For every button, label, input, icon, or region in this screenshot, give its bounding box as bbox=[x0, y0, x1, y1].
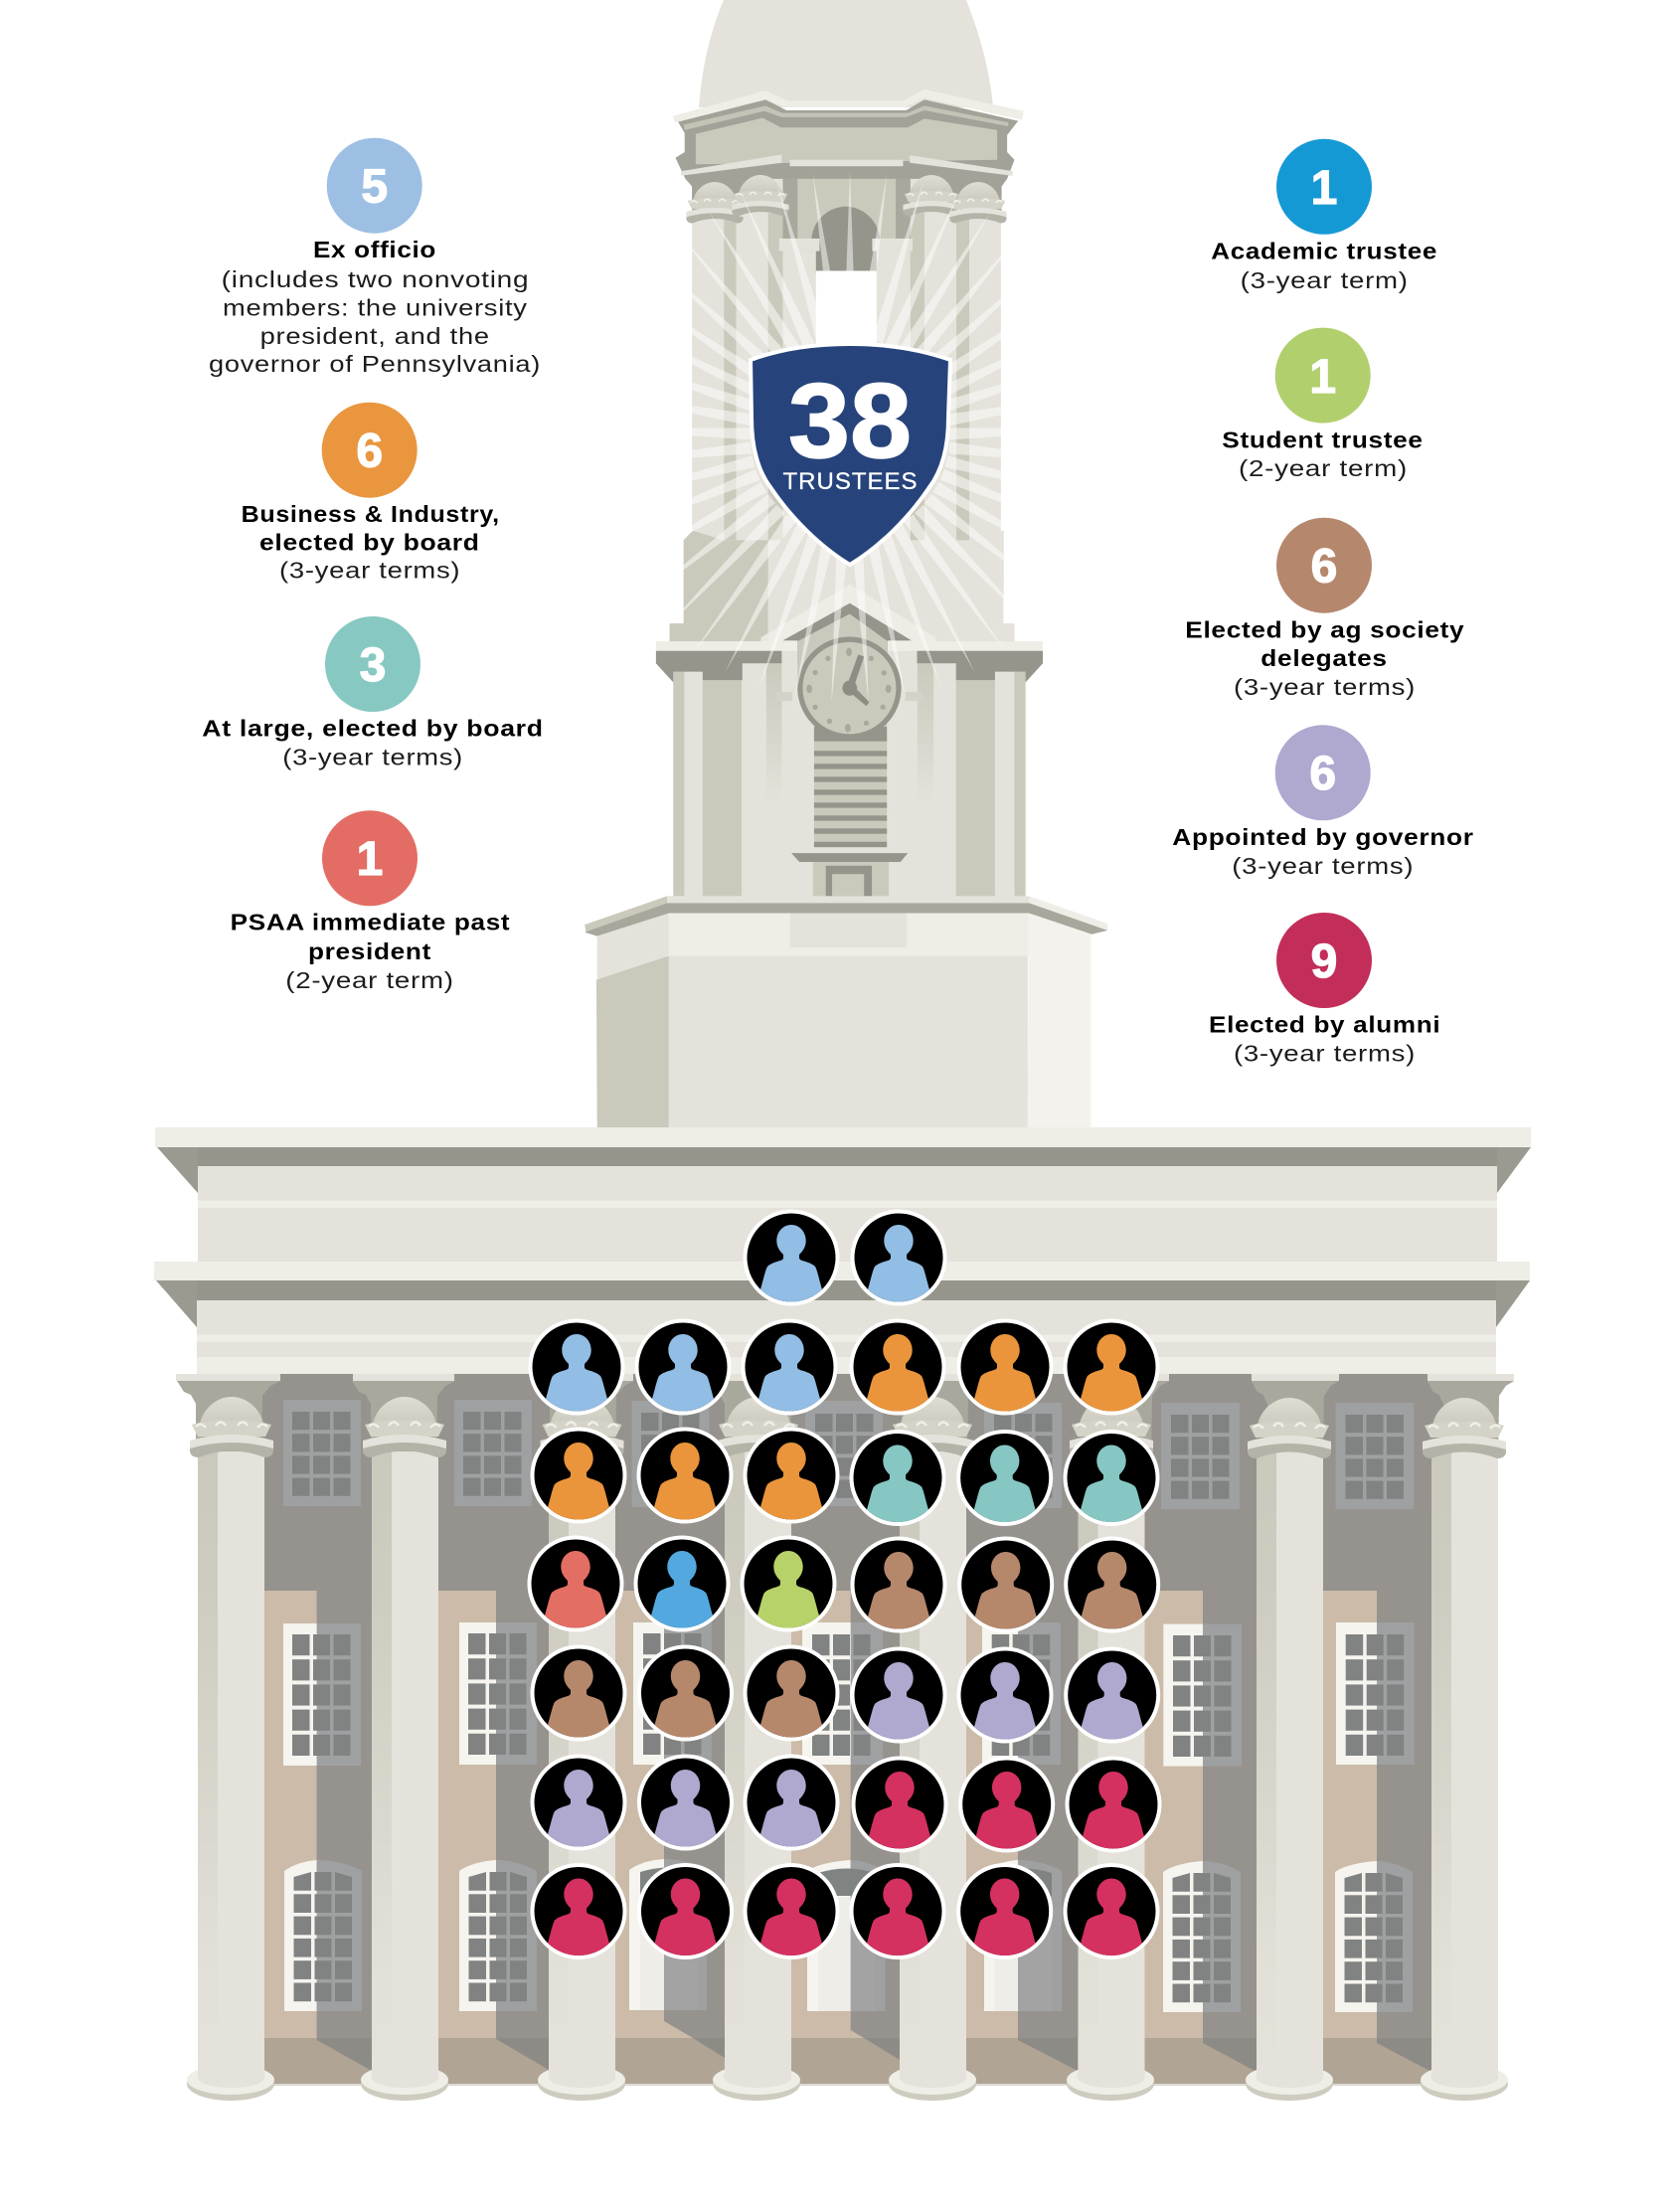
legend: elected by alumni bbox=[1209, 913, 1440, 1066]
legend: appointed by governor bbox=[1172, 725, 1474, 879]
ground band and cast shadows bbox=[232, 2038, 1464, 2086]
legend: ex officio: Ex officio bbox=[313, 237, 436, 262]
legend: appointed by governor: (3-year terms) bbox=[1232, 853, 1414, 879]
legend: ex officio: 5 bbox=[361, 161, 388, 213]
avatar row 3 bbox=[533, 1430, 1157, 1524]
legend: ag society delegates: 6 bbox=[1311, 541, 1337, 593]
legend: academic trustee: 1 bbox=[1311, 162, 1337, 215]
dome bbox=[699, 0, 993, 107]
legend: ex officio: members: the university bbox=[223, 294, 528, 320]
columns bbox=[176, 1374, 1514, 2101]
legend: ag society delegates: delegates bbox=[1260, 645, 1388, 671]
legend: PSAA bbox=[231, 810, 510, 993]
legend: at large: At large, elected by board bbox=[202, 716, 544, 742]
legend: ex officio: (includes two nonvoting bbox=[222, 266, 529, 292]
avatar row 7 bbox=[533, 1865, 1157, 1957]
clock stage bbox=[585, 577, 1107, 1129]
legend: business and industry: 6 bbox=[356, 425, 383, 477]
upper windows bbox=[283, 1400, 1414, 1509]
legend: at large bbox=[202, 616, 544, 769]
legend: ex officio bbox=[209, 138, 541, 377]
legend: appointed by governor: Appointed by governor bbox=[1172, 824, 1474, 850]
arched doors bbox=[629, 1859, 1062, 2011]
legend: business and industry bbox=[242, 403, 500, 584]
lantern capitals bbox=[686, 175, 1007, 223]
legend: ag society delegates: (3-year terms) bbox=[1234, 674, 1416, 700]
legend: academic trustee: Academic trustee bbox=[1211, 239, 1437, 264]
legend: elected by alumni: 9 bbox=[1311, 935, 1337, 988]
clock tower bbox=[585, 0, 1107, 1129]
legend: academic trustee bbox=[1211, 139, 1437, 293]
avatar row 5 bbox=[533, 1646, 1158, 1742]
avatar row 2 bbox=[531, 1320, 1157, 1414]
legend: PSAA: (2-year term) bbox=[285, 967, 454, 993]
light rays behind shield bbox=[584, 171, 1116, 704]
legend: at large: (3-year terms) bbox=[282, 744, 463, 769]
legend: ex officio: president, and the bbox=[260, 323, 490, 349]
legend: student trustee: 1 bbox=[1309, 351, 1336, 404]
legend: student trustee: (2-year term) bbox=[1239, 455, 1408, 481]
legend: academic trustee: (3-year term) bbox=[1241, 267, 1409, 293]
avatar row 6 bbox=[533, 1756, 1159, 1851]
middle windows bbox=[283, 1622, 1415, 1767]
legend: student trustee: Student trustee bbox=[1222, 427, 1424, 453]
legend: PSAA: president bbox=[308, 938, 431, 964]
trustee avatars grid bbox=[529, 1211, 1159, 1957]
legend: PSAA: PSAA immediate past bbox=[231, 910, 510, 935]
main building wall bbox=[198, 1374, 1497, 2086]
legend: elected by alumni: (3-year terms) bbox=[1234, 1040, 1416, 1066]
legend: PSAA: 1 bbox=[357, 833, 383, 886]
tan lower wall sections bbox=[264, 1591, 1377, 2040]
legend: at large: 3 bbox=[360, 639, 386, 692]
shield: 38 trustees bbox=[751, 344, 950, 565]
lower arched windows bbox=[284, 1860, 1413, 2012]
lantern stage with columns bbox=[673, 89, 1024, 596]
legend: business and industry: elected by board bbox=[259, 529, 480, 555]
legend: elected by alumni: Elected by alumni bbox=[1209, 1011, 1440, 1037]
legend: ex officio: governor of Pennsylvania) bbox=[209, 351, 541, 377]
legend: business and industry: (3-year terms) bbox=[279, 558, 460, 584]
legend: business and industry: Business & Industry, bbox=[242, 501, 500, 527]
shield: 38 trustees: TRUSTEES bbox=[783, 468, 917, 495]
legend: ag society delegates bbox=[1185, 518, 1464, 700]
legend: ag society delegates: Elected by ag society bbox=[1185, 617, 1464, 643]
clock face bbox=[800, 639, 899, 737]
shield: 38 trustees: 38 bbox=[788, 361, 912, 480]
entablature and cornices bbox=[154, 1127, 1531, 1374]
avatar row 4 bbox=[529, 1537, 1158, 1630]
avatar row 1 bbox=[746, 1211, 944, 1304]
legend: appointed by governor: 6 bbox=[1309, 748, 1336, 800]
legend: student trustee bbox=[1222, 328, 1424, 481]
